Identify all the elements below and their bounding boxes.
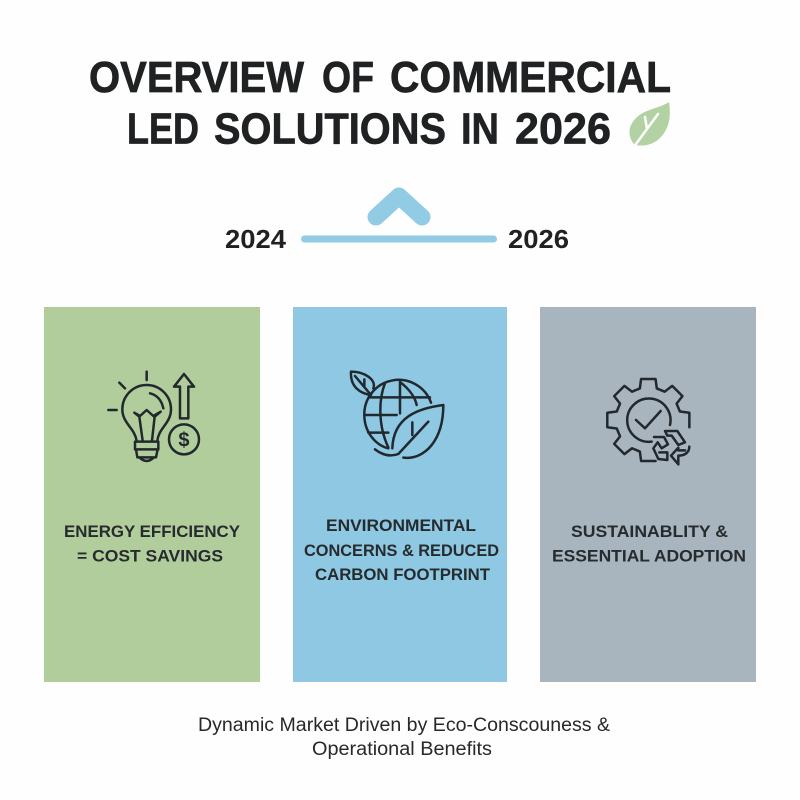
title: OF	[322, 53, 374, 102]
icon: green leaf	[629, 102, 670, 146]
title: 2026	[515, 104, 611, 154]
title: OVERVIEW	[89, 53, 304, 102]
text: environmental concerns: ENVIRONMENTAL	[326, 517, 476, 535]
title: LED	[127, 104, 199, 154]
text: environmental concerns: CONCERNS & REDUCED	[304, 542, 499, 560]
timeline: 2024 to 2026	[225, 196, 569, 254]
title: COMMERCIAL	[390, 53, 671, 102]
panel: sustainability	[540, 307, 756, 682]
text: sustainability: ESSENTIAL ADOPTION	[552, 548, 746, 566]
arrow: upward chevron	[376, 196, 422, 217]
text: energy efficiency: ENERGY EFFICIENCY	[64, 523, 240, 541]
panel: environmental concerns	[293, 307, 507, 682]
icon: gear with check and recycling	[607, 379, 689, 464]
title	[89, 53, 671, 154]
text: environmental concerns	[304, 517, 499, 584]
label: 2024: 2024	[225, 224, 287, 254]
icon: light bulb, arrow and coin	[108, 372, 199, 461]
title: IN	[461, 104, 499, 154]
footer caption	[198, 715, 610, 760]
title: SOLUTIONS	[214, 104, 446, 154]
footer caption: Dynamic Market Driven by Eco-Conscouness &	[198, 715, 610, 736]
icon: globe with leaves	[351, 372, 443, 458]
timeline bar	[301, 236, 497, 242]
text: sustainability: SUSTAINABLITY &	[571, 523, 728, 541]
text: environmental concerns: CARBON FOOTPRINT	[315, 566, 490, 584]
text: energy efficiency	[64, 523, 240, 566]
label: 2026: 2026	[508, 224, 569, 254]
icon: light bulb, arrow and coin: $	[178, 429, 190, 451]
footer caption: Operational Benefits	[312, 739, 492, 760]
text: sustainability	[552, 523, 746, 566]
text: energy efficiency: = COST SAVINGS	[77, 548, 223, 566]
panel: energy efficiency	[44, 307, 260, 682]
